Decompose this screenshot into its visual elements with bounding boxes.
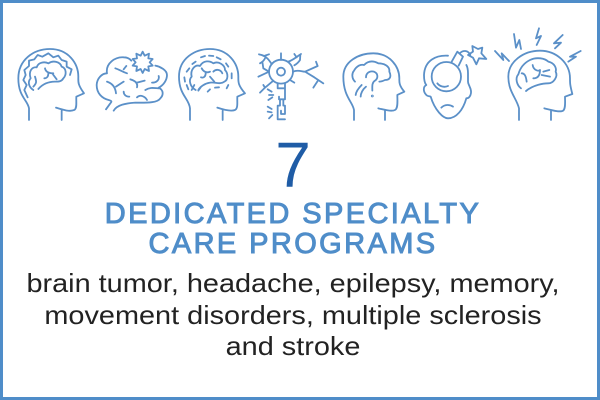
description text: brain tumor, headache, epilepsy, memory, [26, 268, 560, 298]
heading: CARE PROGRAMS [148, 228, 438, 260]
description text: and stroke [226, 331, 360, 361]
icon: head with brain and dashed aura [179, 49, 245, 120]
heading: DEDICATED SPECIALTY [105, 198, 481, 230]
icon: head with brain and wavy aura [18, 49, 84, 120]
description text [26, 268, 560, 361]
icon: head with brain and question mark [343, 53, 404, 120]
icon: brain with burst [97, 52, 167, 111]
icon: neuron [258, 53, 323, 119]
icon: head with bomb and spark [424, 46, 486, 118]
icon: head with brain and lightning bolts [495, 28, 581, 120]
heading [105, 198, 481, 260]
description text: movement disorders, multiple sclerosis [44, 300, 542, 330]
big number 7: 7 [275, 129, 311, 201]
